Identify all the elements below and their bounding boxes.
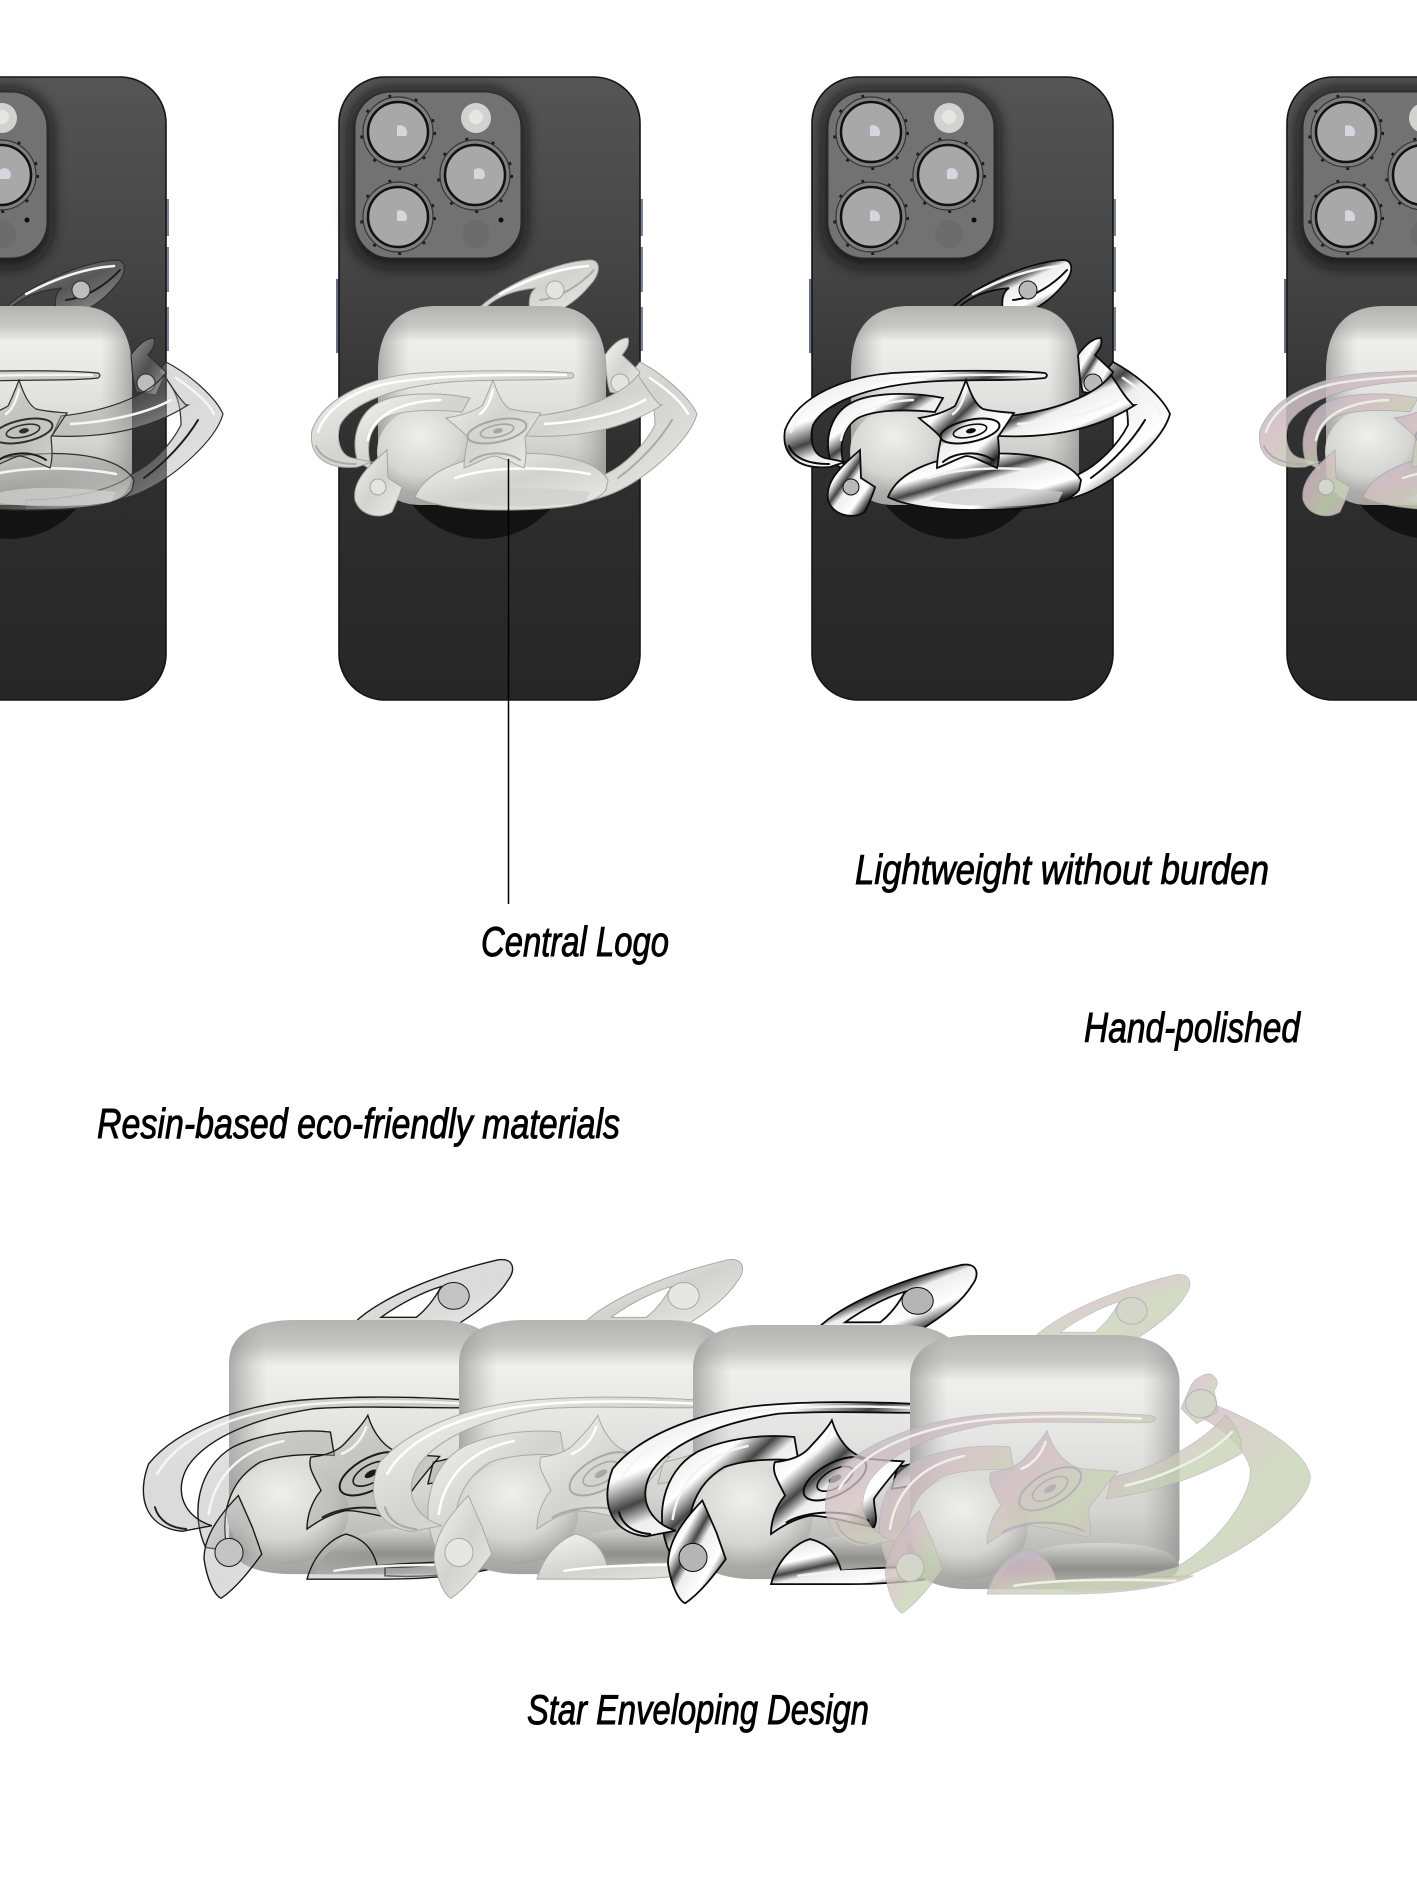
iridescent case	[825, 1275, 1310, 1613]
chrome case	[607, 1265, 1099, 1603]
label: Central Logo: Central Logo	[481, 918, 669, 965]
label: Star Enveloping Design: Star Enveloping Design	[527, 1686, 869, 1733]
glass earbud case	[0, 260, 223, 516]
product lineup: four finishes	[143, 1260, 1310, 1613]
phone 1: glass ornament, cropped at left	[0, 77, 223, 700]
pearl earbud case	[311, 260, 697, 516]
phone 3: chrome ornament	[784, 77, 1170, 700]
phone 4: iridescent ornament, cropped at right	[1259, 77, 1417, 700]
chrome earbud case	[784, 260, 1170, 516]
label: Hand-polished: Hand-polished	[1084, 1004, 1301, 1051]
label: Lightweight without burden: Lightweight without burden	[855, 846, 1269, 893]
leader line: central logo	[508, 459, 510, 904]
label: Resin-based eco-friendly materials: Resin-based eco-friendly materials	[97, 1100, 620, 1147]
iridescent earbud case	[1259, 260, 1417, 516]
glass case	[143, 1260, 635, 1598]
phone 2: pearl ornament	[311, 77, 697, 700]
pearl case	[373, 1260, 865, 1598]
